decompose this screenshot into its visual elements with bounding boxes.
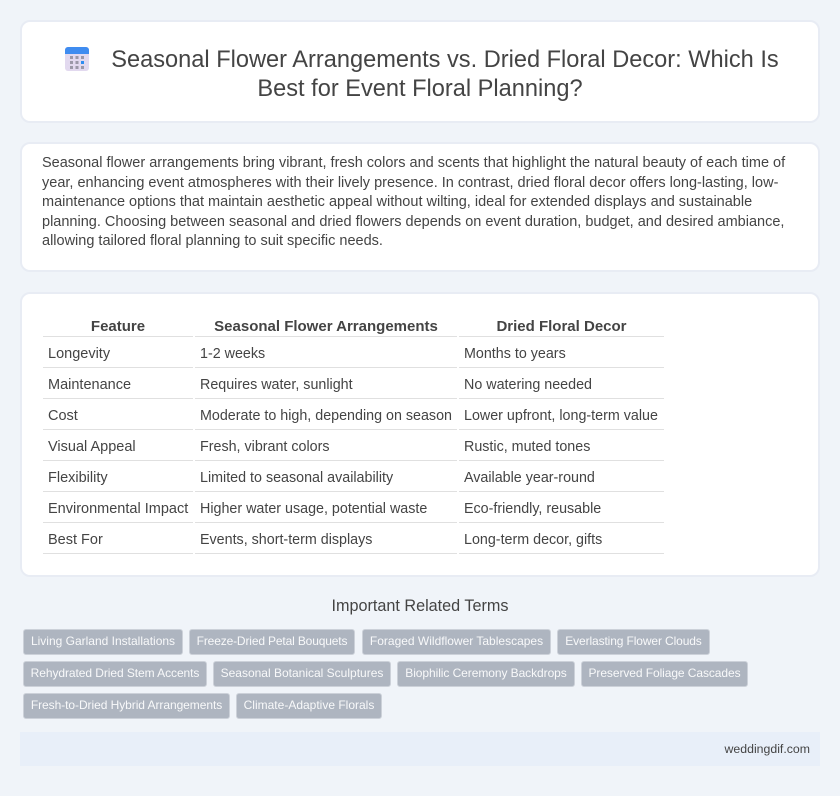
tag: Preserved Foliage Cascades	[588, 666, 740, 680]
tag: Living Garland Installations	[31, 634, 175, 648]
table: feature comparison: Maintenance	[48, 377, 131, 393]
table: feature comparison: Higher water usage, potential waste	[200, 501, 427, 517]
tag: Rehydrated Dried Stem Accents	[31, 666, 199, 680]
table: feature comparison: Dried Floral Decor	[496, 318, 627, 335]
tag: Fresh-to-Dried Hybrid Arrangements	[31, 698, 222, 712]
table: feature comparison: Environmental Impact	[48, 501, 188, 517]
table: feature comparison: Fresh, vibrant colors	[200, 439, 330, 455]
title: Seasonal Flower Arrangements vs. Dried Floral Decor: Which Is	[111, 47, 779, 73]
table: feature comparison: Rustic, muted tones	[464, 439, 590, 455]
table: feature comparison: Longevity	[48, 346, 110, 362]
text block: introduction: year, enhancing event atmospheres with their lively presence. In contrast, dried floral decor offers long-lasting, low-	[42, 175, 778, 191]
tag: Climate-Adaptive Florals	[244, 698, 374, 712]
text block: introduction: Seasonal flower arrangements bring vibrant, fresh colors and scents that highlight the natural beauty of each time of	[42, 155, 785, 171]
table: feature comparison: Seasonal Flower Arrangements	[214, 318, 438, 335]
tag: Biophilic Ceremony Backdrops	[405, 666, 567, 680]
table: feature comparison: Limited to seasonal availability	[200, 470, 393, 486]
tag: Foraged Wildflower Tablescapes	[370, 634, 543, 648]
tag	[362, 629, 551, 655]
table: feature comparison: Available year-round	[464, 470, 595, 486]
text block: introduction: planning. Choosing between seasonal and dried flowers depends on event duration, budget, and desired ambiance,	[42, 214, 784, 230]
table: feature comparison: 1-2 weeks	[200, 346, 265, 362]
tag: Freeze-Dried Petal Bouquets	[197, 634, 347, 648]
tag	[557, 629, 710, 655]
tag	[23, 661, 207, 687]
panel: introduction	[20, 142, 820, 272]
panel: related term tags	[23, 629, 748, 719]
footer	[20, 732, 820, 766]
tag: Seasonal Botanical Sculptures	[221, 666, 383, 680]
table: feature comparison: No watering needed	[464, 377, 592, 393]
text block: introduction: maintenance options that maintain aesthetic appeal without wilting, ideal for extended displays and sustainable	[42, 194, 752, 210]
table: feature comparison: Events, short-term displays	[200, 532, 372, 548]
table: feature comparison	[43, 318, 664, 554]
tag	[397, 661, 575, 687]
table: feature comparison: Moderate to high, depending on season	[200, 408, 452, 424]
title	[111, 47, 779, 102]
table: feature comparison: Visual Appeal	[48, 439, 136, 455]
text block: introduction	[42, 155, 786, 249]
table: feature comparison: Best For	[48, 532, 103, 548]
footer source text: weddingdif.com	[725, 742, 810, 756]
tag	[581, 661, 748, 687]
table: feature comparison: Flexibility	[48, 470, 108, 486]
table: feature comparison: Eco-friendly, reusable	[464, 501, 601, 517]
table: feature comparison: Lower upfront, long-term value	[464, 408, 658, 424]
tag	[189, 629, 355, 655]
table: feature comparison: Requires water, sunlight	[200, 377, 353, 393]
tag	[23, 693, 230, 719]
table: feature comparison: Months to years	[464, 346, 566, 362]
icon: calendar	[65, 47, 89, 71]
text block: introduction: allowing tailored floral planning to suit specific needs.	[42, 233, 383, 249]
panel: header	[20, 20, 820, 123]
tag	[213, 661, 391, 687]
table: feature comparison: Cost	[48, 408, 78, 424]
tag	[236, 693, 382, 719]
tag: Everlasting Flower Clouds	[565, 634, 702, 648]
table: feature comparison: Long-term decor, gifts	[464, 532, 602, 548]
table: feature comparison: Feature	[91, 318, 145, 335]
panel: comparison table	[20, 292, 820, 577]
title: Best for Event Floral Planning?	[257, 76, 583, 102]
heading: related terms: Important Related Terms	[332, 597, 508, 615]
tag	[23, 629, 183, 655]
